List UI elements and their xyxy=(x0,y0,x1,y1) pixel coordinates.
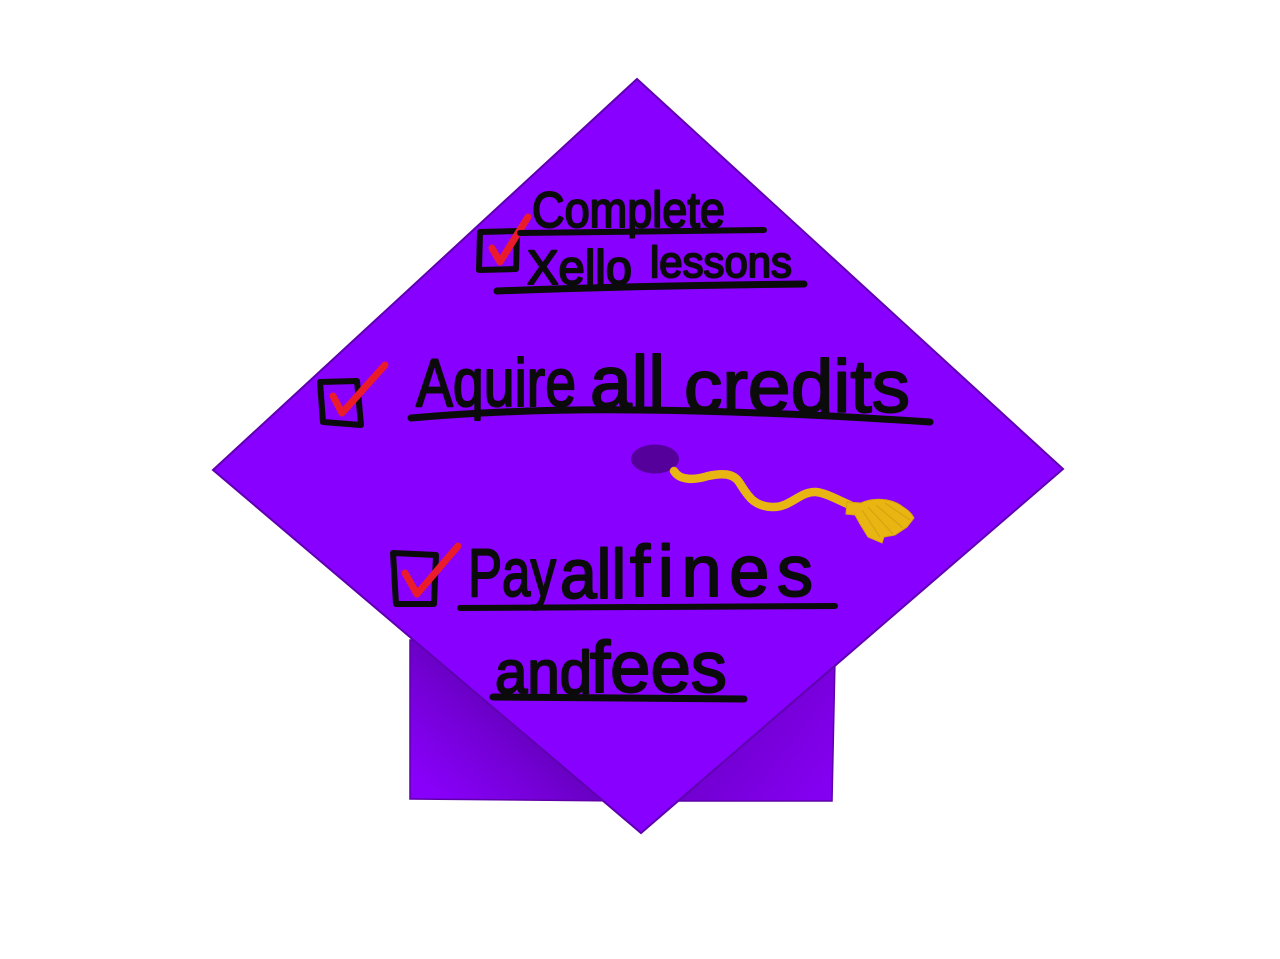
tassel strands xyxy=(862,503,910,537)
label line 2: lessons xyxy=(650,238,792,287)
checklist item: acquire all credits xyxy=(320,341,930,428)
label line 1: Complete xyxy=(532,182,725,238)
checklist item: pay all fines and fees xyxy=(393,532,835,708)
underline 2 xyxy=(493,697,744,699)
label xyxy=(416,341,910,428)
checkbox xyxy=(479,231,517,270)
tassel xyxy=(674,471,914,543)
check mark xyxy=(405,546,458,594)
check mark xyxy=(492,217,528,262)
check mark xyxy=(333,365,385,413)
underline 2 xyxy=(497,284,804,291)
label: Aquire xyxy=(416,345,576,421)
label: credits xyxy=(684,345,910,428)
underline 1 xyxy=(460,606,835,608)
label line 1 xyxy=(468,532,813,613)
label line 2: Xello xyxy=(527,242,632,295)
label: all xyxy=(590,341,665,424)
label line 1: all xyxy=(560,535,626,613)
label line 2: and xyxy=(495,639,592,706)
label line 2 xyxy=(527,238,792,295)
cap top diamond xyxy=(213,79,1063,833)
underline xyxy=(411,410,930,422)
cap button xyxy=(631,444,679,474)
tassel cord xyxy=(674,471,850,507)
label line 1: Pay xyxy=(468,535,556,611)
checklist item: complete Xello lessons xyxy=(479,182,804,295)
underline 1 xyxy=(520,230,764,233)
label line 1: fines xyxy=(630,532,813,612)
label line 2: fees xyxy=(590,628,727,708)
checkbox xyxy=(393,553,436,604)
tassel head xyxy=(846,499,914,543)
checkbox xyxy=(320,381,361,425)
label line 2 xyxy=(495,628,727,708)
cap back band xyxy=(410,640,835,801)
